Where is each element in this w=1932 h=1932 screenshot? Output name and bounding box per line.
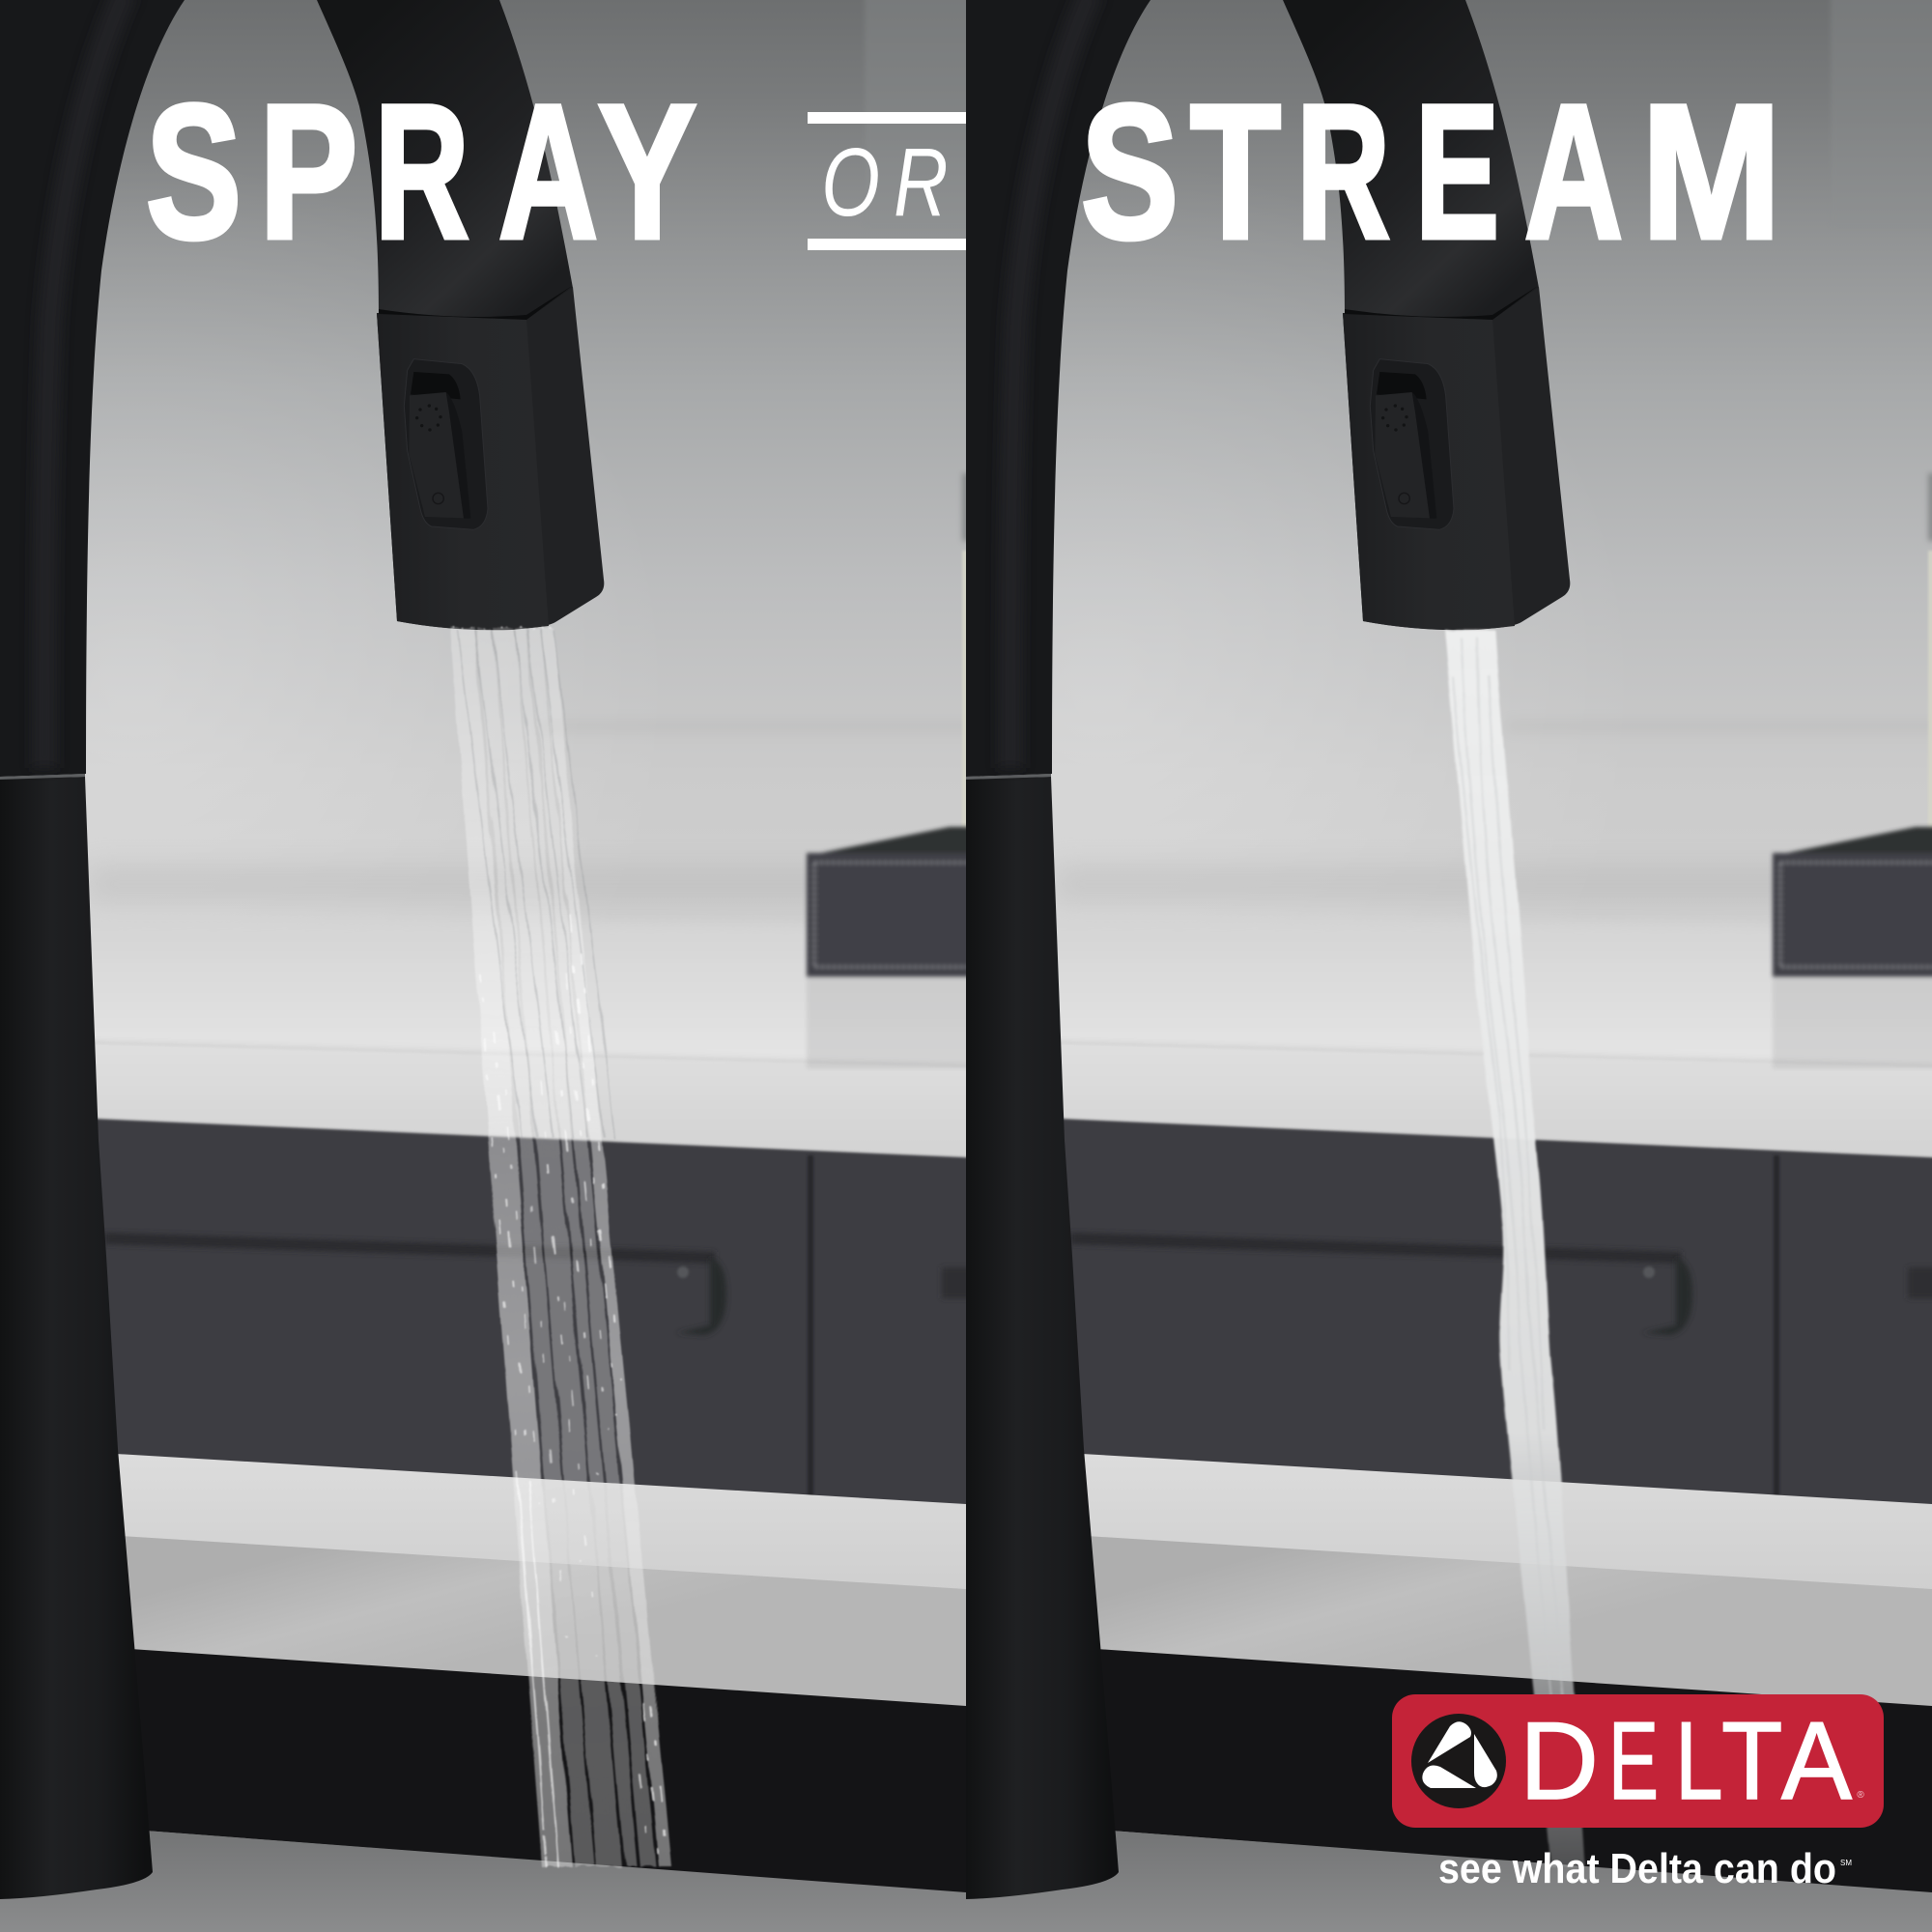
faucet: lower body [0, 777, 153, 1899]
spray button [404, 359, 488, 529]
tagline: see what Delta can do [1438, 1845, 1836, 1892]
stream body [1444, 630, 1585, 1866]
heading: STREAM: R [1296, 65, 1390, 278]
panel: kitchen scene with faucet (stream side) [966, 0, 1932, 1932]
sink rim: top surface [116, 1454, 966, 1590]
registered mark: ® [1857, 1790, 1864, 1801]
logo background [1392, 1694, 1884, 1828]
faucet: arc riser [0, 0, 185, 777]
faucet: arm [317, 0, 573, 322]
background wall [0, 0, 1005, 966]
spray sparkle streaks [454, 628, 668, 1866]
heading: SPRAY: A [498, 65, 598, 278]
dark sink interior [130, 1649, 966, 1893]
heading: STREAM: M [1641, 65, 1781, 278]
heading: STREAM: A [1524, 65, 1623, 278]
heading: OR with rules [808, 112, 966, 250]
heading: STREAM: T [1190, 65, 1281, 278]
logo wordmark: L [1675, 1700, 1723, 1823]
heading: SPRAY: R [375, 65, 469, 278]
spray shadow streaks [458, 630, 615, 1138]
foreground deck [0, 1816, 966, 1932]
dark cabinets [92, 1119, 1005, 1512]
panel: kitchen scene with faucet (spray side) [0, 0, 1008, 1932]
heading: SPRAY: P [259, 65, 357, 278]
logo wordmark: T [1721, 1700, 1782, 1823]
faucet: spray head [377, 286, 604, 630]
faucet: joint highlight [0, 774, 85, 780]
logo: Delta badge [1392, 1694, 1884, 1828]
heading: STREAM: E [1415, 65, 1499, 278]
logo wordmark: E [1608, 1700, 1659, 1823]
dark box on counter [807, 827, 1008, 977]
water: spray [450, 628, 671, 1866]
spray strips [450, 628, 671, 1866]
sink rim: front face [121, 1536, 966, 1707]
icon: Delta triangle mark [1411, 1714, 1506, 1808]
heading: SPRAY: S [146, 65, 242, 278]
stream texture [1453, 638, 1563, 1700]
water: stream [1444, 630, 1585, 1866]
heading: SPRAY: Y [598, 65, 696, 278]
service mark: SM [1840, 1859, 1852, 1867]
back counter top and front edge [77, 918, 1005, 1161]
logo wordmark: A [1781, 1700, 1852, 1823]
heading: OR with rules: OR [821, 129, 948, 237]
heading: STREAM: S [1081, 65, 1179, 278]
logo wordmark: D [1520, 1700, 1599, 1823]
